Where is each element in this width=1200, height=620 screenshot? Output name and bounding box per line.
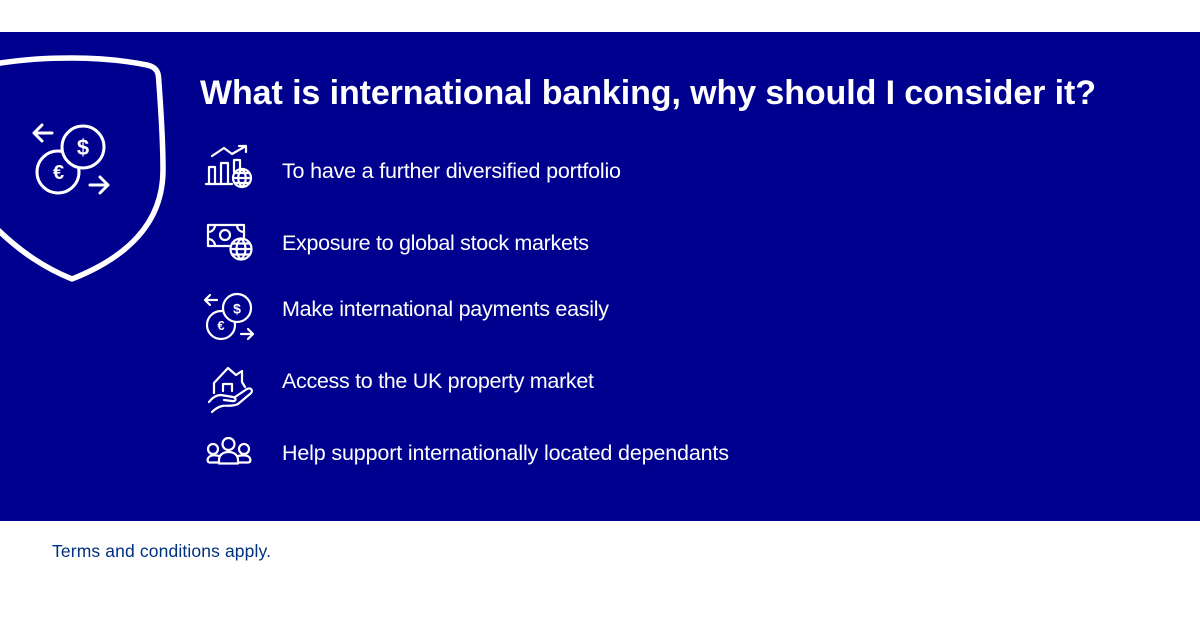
icon: currency exchange [34, 125, 108, 193]
text: stock markets: Exposure to global stock markets [282, 231, 589, 255]
shield outline [0, 58, 163, 279]
text: payments: Make international payments easily [282, 297, 609, 321]
text: portfolio: To have a further diversified portfolio [282, 159, 621, 183]
list item: global stock markets [208, 225, 589, 260]
icon: currency exchange small [205, 294, 253, 339]
panel: blue banner [0, 32, 1200, 521]
list item: UK property [209, 368, 594, 412]
shield emblem [0, 58, 163, 279]
title: What is international banking, why should I consider it? [200, 74, 1096, 112]
text: dependants: Help support internationally located dependants [282, 441, 729, 465]
icon: house in hand [209, 368, 252, 412]
icon: currency exchange small: € [217, 318, 225, 333]
icon: currency exchange small: $ [233, 300, 241, 316]
icon: chart with globe [206, 146, 251, 187]
list item: international payments [205, 294, 609, 339]
icon: banknote with globe [208, 225, 252, 260]
icon: currency exchange: $ [77, 135, 89, 160]
footnote: Terms and conditions apply. [52, 541, 271, 561]
icon: currency exchange: € [53, 162, 64, 184]
icon: group of people [208, 438, 250, 464]
text: property: Access to the UK property market [282, 369, 594, 393]
list item: diversified portfolio [206, 146, 621, 187]
list item: dependants [208, 438, 729, 465]
